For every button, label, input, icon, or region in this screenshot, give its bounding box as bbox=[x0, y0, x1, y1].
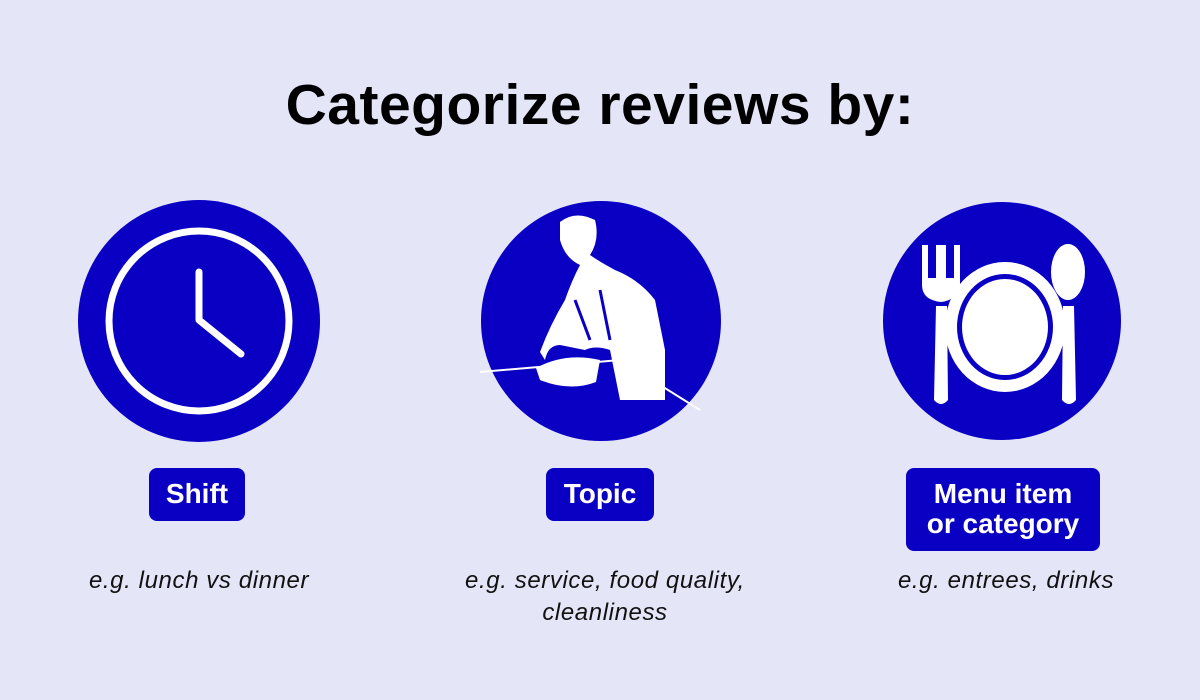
text: topic example bbox=[465, 567, 745, 626]
label: Menu item or category: Menu item bbox=[934, 478, 1072, 509]
label: Menu item or category: or category bbox=[927, 508, 1079, 539]
label: Topic bbox=[546, 468, 654, 521]
icon: plate with fork and spoon bbox=[883, 202, 1121, 440]
text: topic example: e.g. service, food quality, bbox=[465, 567, 745, 594]
text: menu example: e.g. entrees, drinks bbox=[898, 567, 1114, 594]
label: Menu item or category bbox=[906, 468, 1100, 551]
label: Topic: Topic bbox=[564, 478, 636, 509]
icon: chef bbox=[480, 201, 721, 441]
label: Shift bbox=[149, 468, 245, 521]
text: shift example: e.g. lunch vs dinner bbox=[89, 567, 309, 594]
text: topic example: cleanliness bbox=[542, 599, 668, 626]
title: Categorize reviews by: bbox=[286, 73, 914, 137]
label: Shift: Shift bbox=[166, 478, 228, 509]
icon: clock bbox=[78, 200, 320, 442]
